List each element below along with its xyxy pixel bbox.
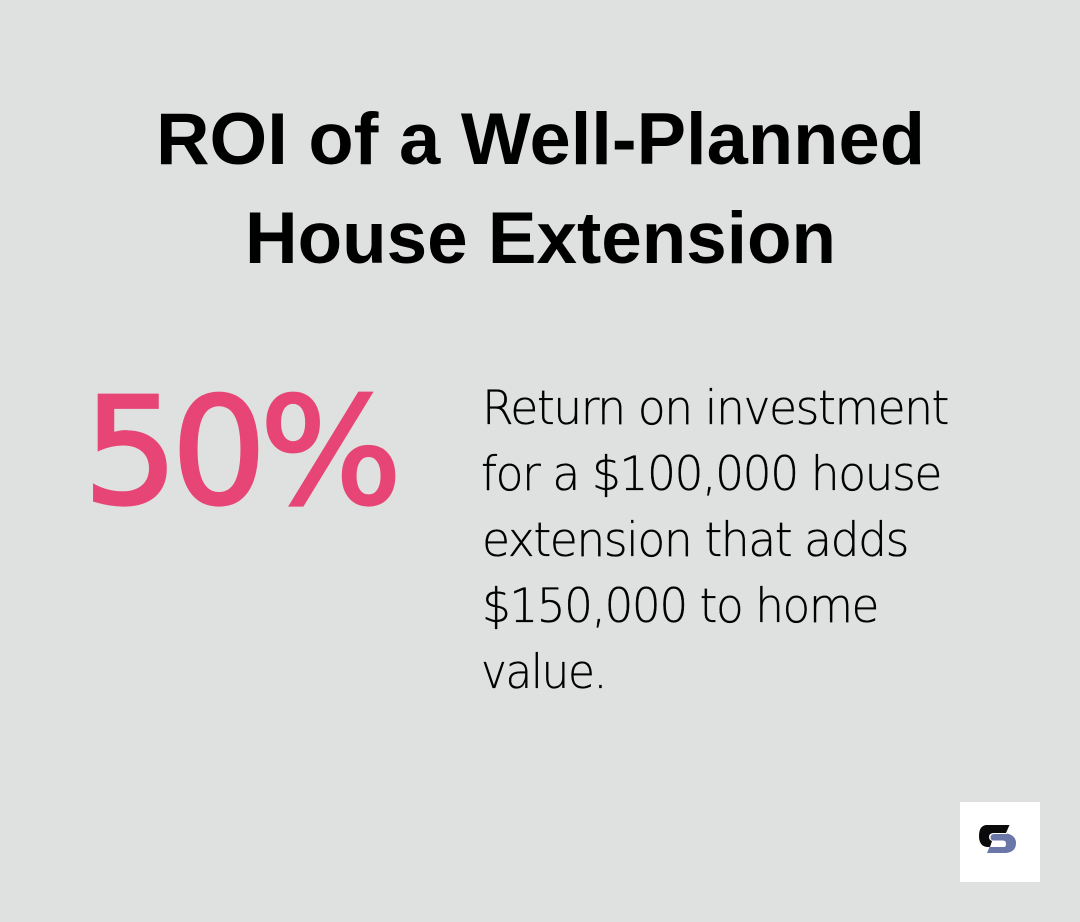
logo badge: [960, 802, 1040, 882]
description text: [481, 381, 948, 700]
title: ROI of a Well-Planned: [156, 99, 925, 180]
big statistic: 50%: 50%: [83, 366, 395, 538]
description text: $150,000 to home: [482, 579, 878, 634]
description text: value.: [481, 645, 606, 700]
title: House Extension: [245, 198, 836, 279]
title: [156, 99, 925, 279]
icon: S logo: [979, 825, 1016, 853]
description text: Return on investment: [482, 381, 948, 436]
description text: for a $100,000 house: [481, 447, 941, 502]
description text: extension that adds: [482, 513, 908, 568]
